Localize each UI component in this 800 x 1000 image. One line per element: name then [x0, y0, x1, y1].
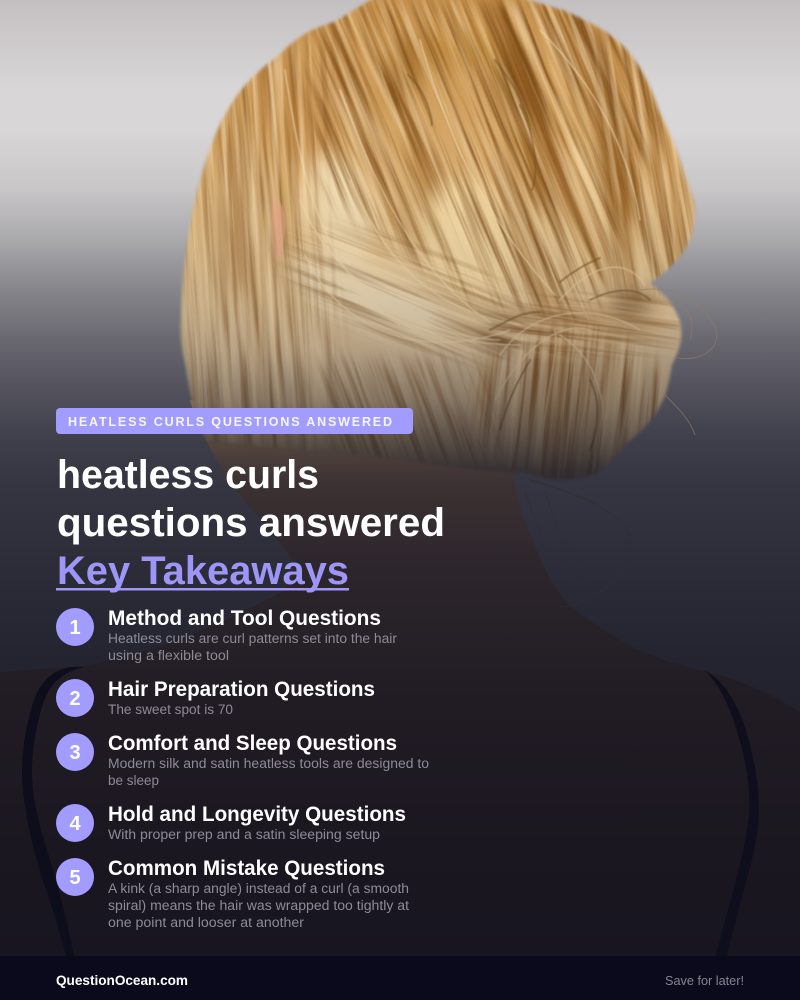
neck curls — [525, 480, 632, 607]
item 3: comfort and sleep: Comfort and Sleep Questions — [108, 732, 397, 755]
item 5: common mistake: one point and looser at another — [108, 915, 305, 930]
item 5: common mistake: Common Mistake Questions — [108, 857, 385, 880]
loose hair curls — [640, 289, 717, 435]
item 1: method and tool: using a flexible tool — [108, 648, 229, 663]
category tag: HEATLESS CURLS QUESTIONS ANSWERED — [68, 415, 392, 429]
item 3: comfort and sleep: Modern silk and satin heatless tools are designed to — [108, 756, 429, 771]
left dress strap — [22, 667, 84, 956]
title: questions answered — [57, 501, 445, 545]
item 1: method and tool: Heatless curls are curl patterns set into the hair — [108, 631, 398, 646]
item 4: hold and longevity: 4 — [69, 813, 81, 835]
item 3: comfort and sleep: 3 — [69, 742, 81, 764]
item 1: method and tool: Method and Tool Questions — [108, 607, 381, 630]
item 2: hair preparation: 2 — [69, 688, 81, 710]
item 3: comfort and sleep — [56, 732, 429, 788]
title: Key Takeaways — [57, 549, 349, 593]
item 5: common mistake — [56, 857, 409, 930]
strand texture — [306, 0, 666, 324]
item 4: hold and longevity: With proper prep and a satin sleeping setup — [108, 827, 380, 842]
item 2: hair preparation: Hair Preparation Questions — [108, 678, 375, 701]
item 2: hair preparation — [56, 678, 375, 717]
item 4: hold and longevity: Hold and Longevity Questions — [108, 803, 406, 826]
footer bar — [0, 956, 800, 1000]
fade on hair — [180, 230, 688, 482]
item 5: common mistake: A kink (a sharp angle) instead of a curl (a smooth — [108, 881, 409, 896]
right dress strap — [705, 671, 759, 956]
item 4: hold and longevity — [56, 803, 406, 842]
ear — [272, 195, 285, 263]
neck and shoulders — [0, 400, 800, 1000]
title — [56, 453, 445, 593]
title: heatless curls — [57, 453, 319, 497]
footer bar: QuestionOcean.com — [56, 972, 188, 988]
item 5: common mistake: spiral) means the hair was wrapped too tightly at — [108, 898, 409, 913]
item 1: method and tool — [56, 607, 398, 663]
item 3: comfort and sleep: be sleep — [108, 773, 159, 788]
item 1: method and tool: 1 — [69, 617, 81, 639]
category tag — [56, 408, 413, 434]
hair — [179, 0, 697, 480]
item 5: common mistake: 5 — [69, 867, 81, 889]
footer bar: Save for later! — [665, 973, 744, 988]
item 2: hair preparation: The sweet spot is 70 — [108, 702, 233, 717]
bun strands — [495, 266, 646, 442]
